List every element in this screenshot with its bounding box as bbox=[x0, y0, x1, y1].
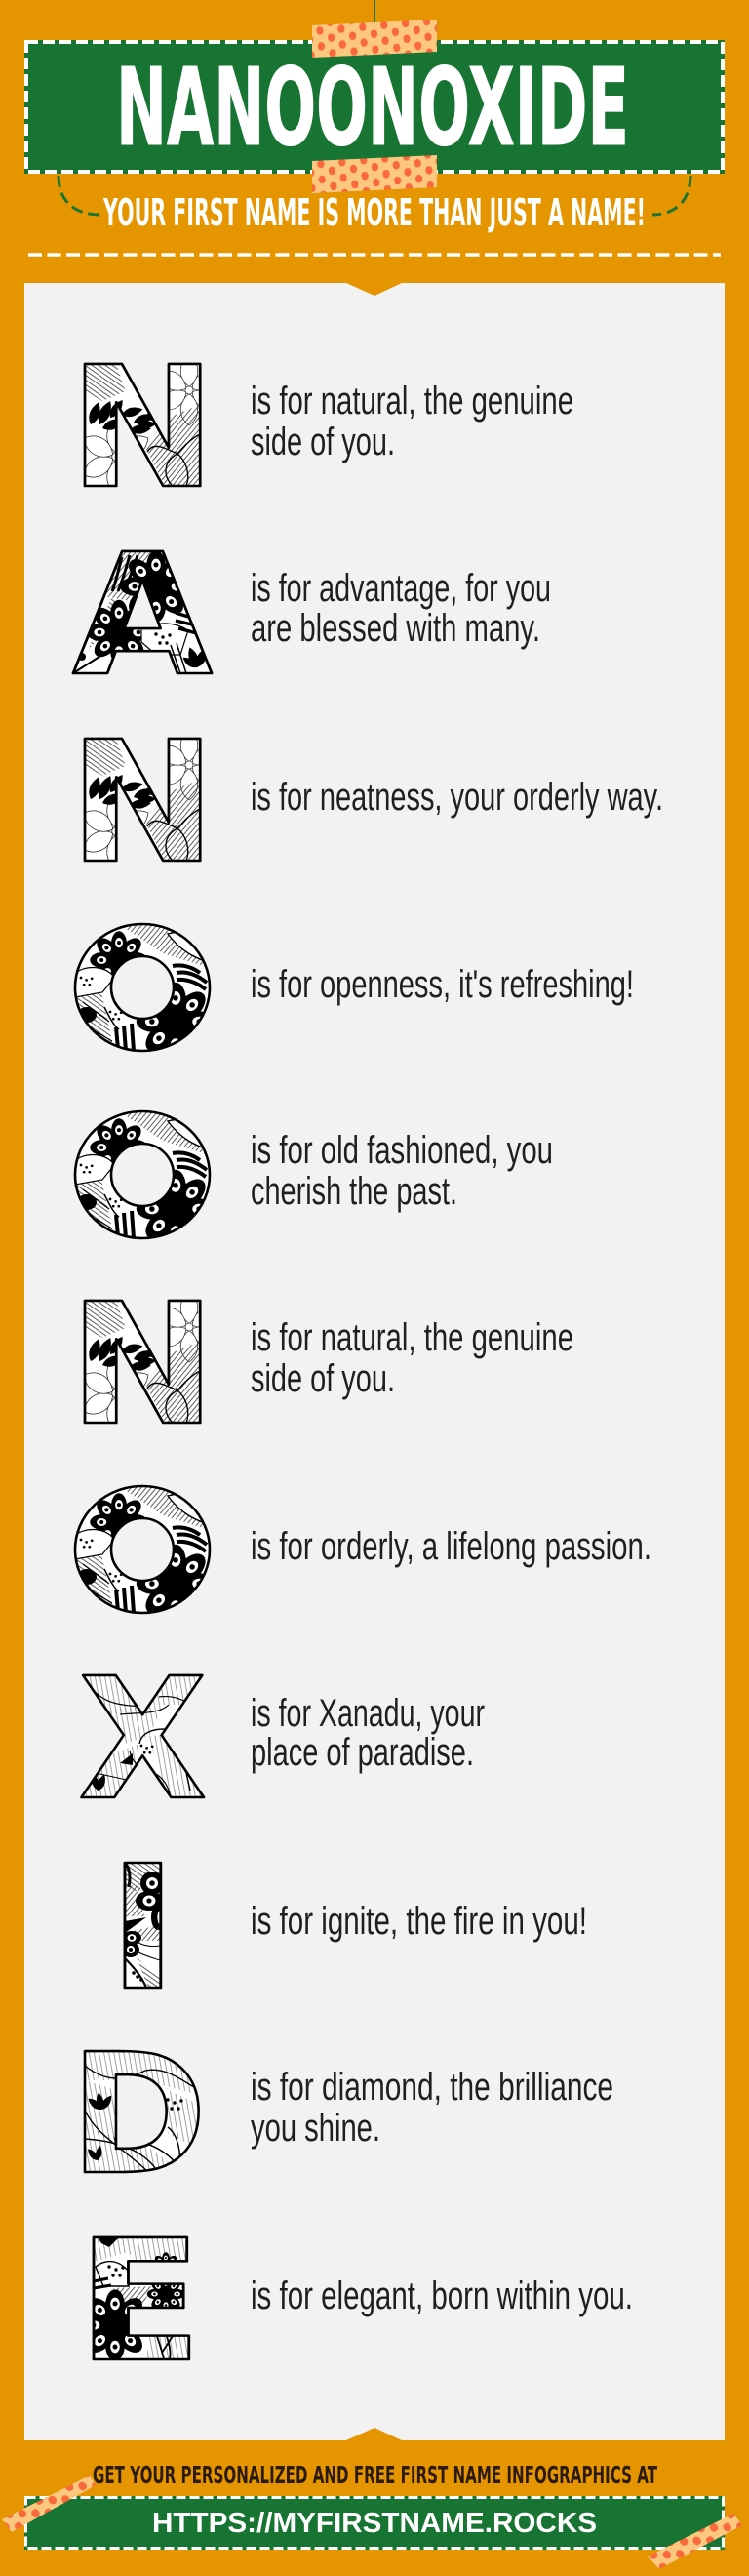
icon: letter N: N bbox=[68, 704, 217, 901]
text: A advantage: are blessed with many. bbox=[251, 607, 540, 650]
icon: letter O bbox=[75, 924, 215, 1061]
icon: letter O bbox=[75, 1486, 215, 1623]
icon: letter X bbox=[80, 1674, 205, 1799]
row: I ignite bbox=[107, 1829, 587, 2029]
icon: letter E: E bbox=[77, 2204, 203, 2399]
icon: letter I bbox=[123, 1862, 162, 1989]
text: X Xanadu bbox=[251, 1692, 485, 1774]
curly connector right bbox=[652, 176, 690, 215]
tape: footer left bbox=[2, 2475, 96, 2532]
icon: letter N: N bbox=[68, 1267, 217, 1463]
row: X Xanadu bbox=[78, 1643, 485, 1837]
row: O openness bbox=[75, 924, 634, 1061]
icon: letter A bbox=[72, 550, 213, 675]
tape: bottom bbox=[312, 155, 437, 193]
text: D diamond: is for diamond, the brilliance bbox=[251, 2066, 613, 2109]
row: N natural bbox=[84, 1300, 572, 1425]
row: E elegant bbox=[92, 2236, 630, 2361]
row: A advantage bbox=[72, 519, 551, 713]
curly connector left bbox=[59, 176, 100, 215]
text: N natural: is for natural, the genuine bbox=[251, 380, 573, 423]
icon: letter D: D bbox=[69, 2019, 208, 2212]
footer banner bbox=[24, 2496, 725, 2550]
footer url: HTTPS://MYFIRSTNAME.ROCKS bbox=[152, 2508, 597, 2539]
tape: top bbox=[312, 20, 437, 58]
icon: letter I: I bbox=[107, 1829, 178, 2029]
icon: letter D bbox=[84, 2049, 200, 2174]
icon: letter N bbox=[84, 738, 202, 863]
row: O old fashioned bbox=[75, 1111, 553, 1248]
tape: footer right bbox=[648, 2514, 742, 2569]
icon: letter A: A bbox=[72, 519, 213, 713]
row: N natural bbox=[68, 330, 573, 526]
text: N natural bbox=[251, 1316, 573, 1400]
icon: letter X: X bbox=[78, 1643, 207, 1837]
panel: letters bbox=[24, 283, 725, 2440]
icon: letter E bbox=[92, 2236, 191, 2361]
text: A advantage bbox=[251, 567, 551, 650]
title banner bbox=[24, 20, 725, 193]
icon: letter O bbox=[75, 1111, 215, 1248]
text: N natural: side of you. bbox=[251, 421, 395, 463]
icon: letter N: N bbox=[68, 330, 217, 526]
text: O old fashioned: is for old fashioned, you bbox=[251, 1129, 553, 1172]
icon: letter N bbox=[84, 363, 202, 488]
text: D diamond bbox=[251, 2066, 613, 2150]
text: O old fashioned: cherish the past. bbox=[251, 1170, 457, 1213]
hanging thread bbox=[374, 0, 375, 23]
text: N natural: side of you. bbox=[251, 1357, 395, 1400]
text: N natural: is for natural, the genuine bbox=[251, 1316, 573, 1359]
icon: letter N bbox=[84, 1300, 202, 1425]
text: X Xanadu: is for Xanadu, your bbox=[251, 1692, 485, 1735]
row: N neatness bbox=[84, 738, 661, 863]
text: X Xanadu: place of paradise. bbox=[251, 1731, 474, 1774]
row: O orderly bbox=[75, 1486, 651, 1623]
text: A advantage: is for advantage, for you bbox=[251, 567, 551, 610]
text: D diamond: you shine. bbox=[251, 2107, 380, 2150]
text: I ignite: is for ignite, the fire in you! bbox=[251, 1900, 587, 1943]
row: D diamond bbox=[69, 2019, 613, 2212]
text: O old fashioned bbox=[251, 1129, 553, 1213]
text: N natural bbox=[251, 380, 573, 463]
